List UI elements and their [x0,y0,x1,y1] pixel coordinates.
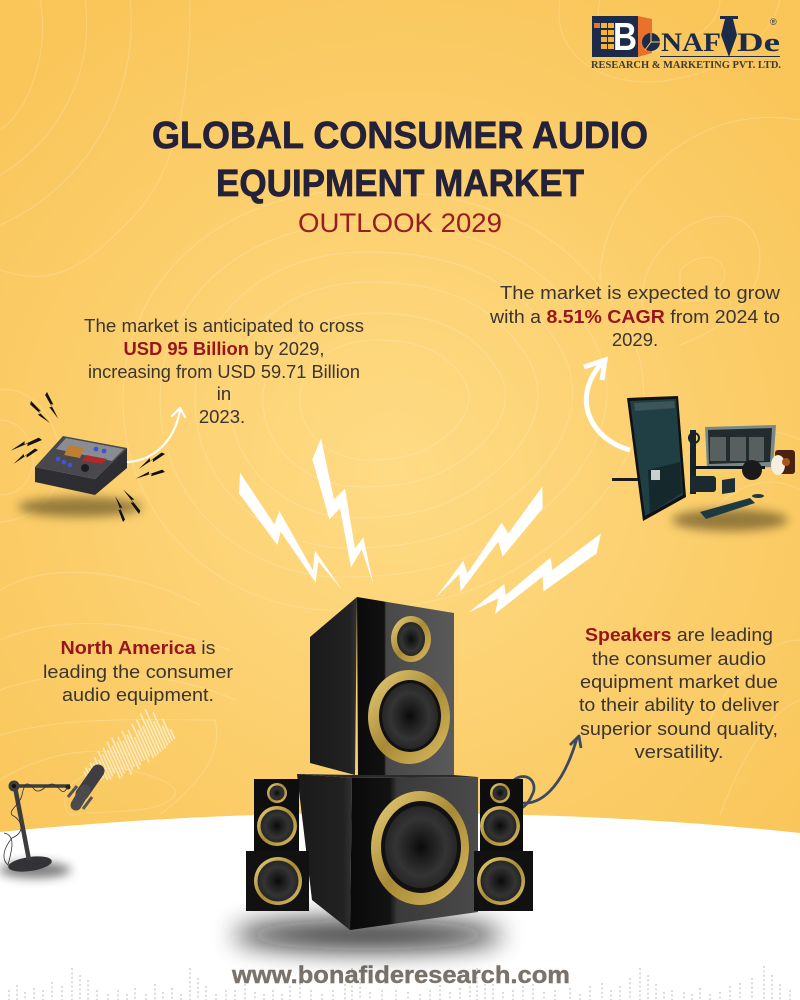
text: market size: increasing from USD 59.71 Billion [88,361,360,382]
text: North America: North America is [61,637,216,658]
website footer: www.bonafideresearch.com [231,962,570,989]
text: market size: in [217,383,231,404]
logo: ® [770,17,777,27]
text: Speakers: equipment market due [580,671,778,692]
footer sound-wave dots [9,966,790,1000]
logo: De [737,28,780,57]
icon: sound wave [71,703,181,792]
text: CAGR: 2029. [612,329,658,350]
text: CAGR: with a 8.51% CAGR from 2024 to [489,306,780,327]
title: GLOBAL CONSUMER AUDIO [152,115,648,157]
text: North America: audio equipment. [62,684,214,705]
icon: black sound bolts around console [9,391,166,523]
text: CAGR [489,282,781,350]
subtitle: OUTLOOK 2029 [298,208,502,238]
text: market size: USD 95 Billion by 2029, [124,338,324,359]
icon: mixing console [18,436,142,517]
left satellite speakers [246,779,309,911]
top speaker [310,597,454,775]
text: market size: The market is anticipated to cross [84,315,364,336]
logo: B [613,16,637,59]
logo: NAF [661,28,721,57]
icon: monitors [612,396,795,531]
text: market size [84,315,364,427]
text: Speakers [579,624,779,762]
arrow: speakers to text [510,736,581,810]
title: EQUIPMENT MARKET [216,163,584,205]
text: Speakers: to their ability to deliver [579,694,779,715]
arrow: console to market size [128,408,185,462]
title [152,115,648,205]
text: Speakers: Speakers are leading [585,624,773,645]
text: Speakers: versatility. [634,741,724,762]
text: market size: 2023. [199,406,245,427]
white lightning bolts [239,438,601,614]
text: North America [43,637,233,705]
text: Speakers: the consumer audio [592,648,766,669]
speaker set [246,597,533,930]
text: CAGR: The market is expected to grow [500,282,781,303]
white curved base [0,813,800,1000]
text: North America: leading the consumer [43,661,233,682]
subwoofer [297,774,478,930]
arrow: monitors to CAGR [584,360,630,450]
logo: RESEARCH & MARKETING PVT. LTD. [591,60,781,71]
logo [591,16,781,71]
right satellite speakers [474,779,533,911]
text: Speakers: superior sound quality, [580,718,778,739]
icon: microphone on boom arm [0,771,98,878]
speaker ground shadow [233,920,503,950]
